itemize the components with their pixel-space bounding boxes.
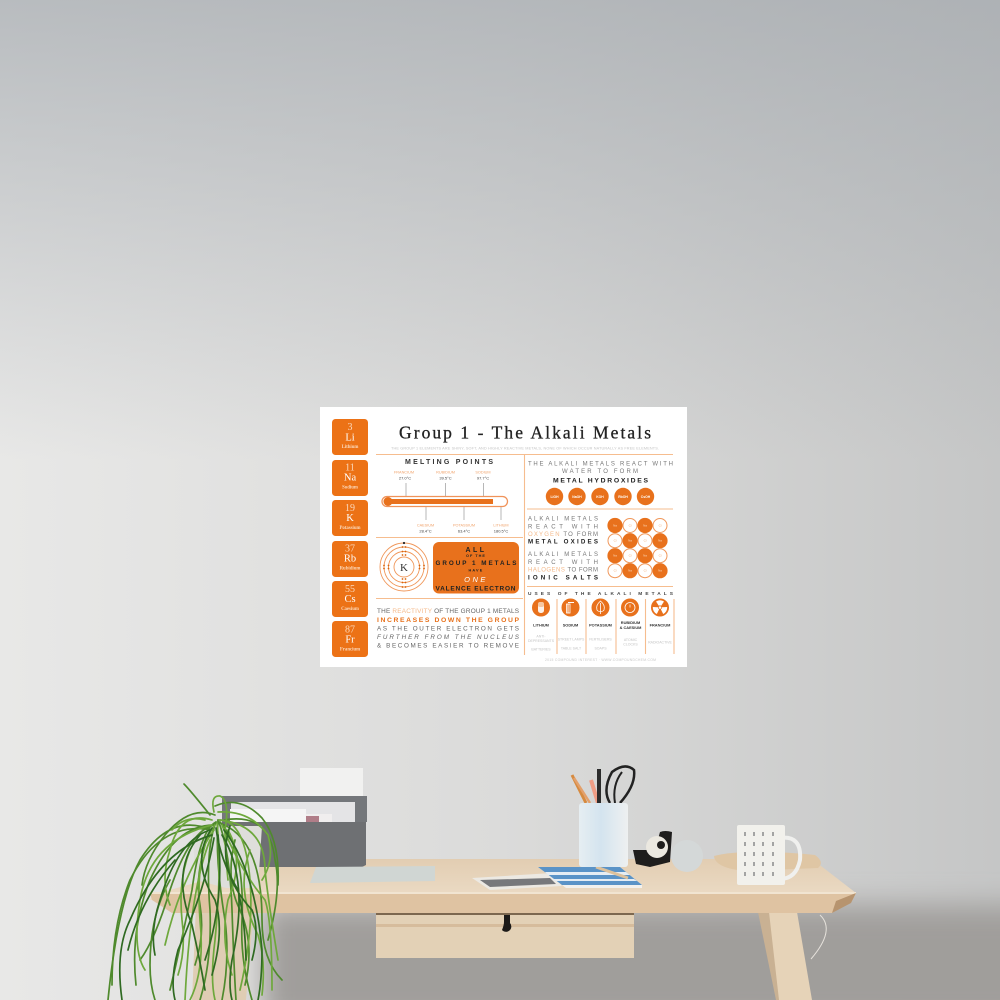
callout: one valence electron: HAVE (468, 568, 484, 572)
panel: ionic salts text: IONIC SALTS (528, 574, 598, 582)
tile: rubidium: Rubidium (340, 566, 360, 572)
callout: one valence electron (433, 542, 519, 594)
ionic lattice diagram: Cl (659, 554, 662, 558)
use details: BATTERIES (531, 648, 551, 652)
tile: sodium: Sodium (342, 486, 358, 490)
desk organiser (222, 768, 367, 867)
temperature labels: CAESIUM (417, 524, 434, 528)
use labels: POTASSIUM (589, 622, 612, 628)
text block: reactivity: INCREASES DOWN THE GROUP (377, 617, 519, 624)
use details: FERTILISERS (589, 638, 612, 642)
panel: metal oxides text: OXYGEN TO FORM (528, 532, 598, 538)
magazine (472, 873, 562, 890)
use details: STREET LAMPS (558, 638, 585, 642)
tile: lithium (332, 419, 368, 455)
icon: sodium street lamp (562, 598, 580, 616)
blue notebook (538, 867, 642, 888)
temperature labels: LITHIUM (493, 524, 509, 528)
tile: potassium: K (346, 513, 354, 524)
panel: ionic salts text: ALKALI METALS (528, 552, 598, 558)
tile: lithium: Li (345, 432, 355, 444)
tile: sodium: Na (344, 472, 356, 484)
tile: francium: 87 (345, 624, 355, 636)
potassium atom diagram: K (400, 562, 408, 574)
ionic lattice diagram: Na (628, 539, 632, 543)
ionic lattice diagram: Cl (644, 539, 647, 543)
tile: francium (332, 621, 368, 657)
panel: metal oxides text: METAL OXIDES (528, 538, 598, 546)
callout: one valence electron: ONE (464, 575, 488, 584)
text block: reactivity (377, 608, 520, 650)
ionic lattice diagram: Na (658, 569, 662, 573)
ionic lattice diagram: Cl (629, 554, 632, 558)
tile: potassium: Potassium (339, 526, 361, 531)
tile: caesium: Cs (344, 594, 356, 605)
potassium atom diagram (380, 542, 428, 591)
ionic lattice diagram: Cl (659, 524, 662, 528)
text block: reactivity: THE REACTIVITY OF THE GROUP 1 METALS (377, 608, 519, 615)
ionic lattice diagram: Cl (614, 569, 617, 573)
panel: ionic salts text (528, 552, 598, 582)
icon: radioactive trefoil (651, 598, 669, 616)
icon: lithium battery (532, 598, 550, 616)
temperature labels: 28.4°C (419, 528, 432, 534)
tile: caesium: 55 (345, 584, 355, 595)
ionic lattice diagram: Na (658, 539, 662, 543)
panel: metal oxides text (528, 516, 598, 546)
ionic lattice diagram: Cl (629, 524, 632, 528)
temperature labels: FRANCIUM (394, 470, 414, 474)
use details: CLOCKS (623, 642, 638, 646)
thermometer (382, 496, 508, 506)
temperature labels: 39.5°C (439, 476, 452, 480)
use labels: RUBIDIUM (621, 620, 640, 625)
tile: lithium: Lithium (342, 445, 358, 450)
tile: potassium (332, 500, 368, 536)
use labels: & CAESIUM (620, 625, 641, 630)
ionic lattice diagram (607, 518, 668, 578)
tile: francium: Francium (340, 648, 360, 652)
ionic lattice diagram: Na (643, 524, 647, 528)
tile: francium: Fr (345, 634, 355, 646)
use details (528, 634, 673, 652)
ionic lattice diagram: Na (628, 569, 632, 573)
footer credit: 2015 COMPOUND INTEREST · WWW.COMPOUNDCHEM.COM (545, 658, 656, 662)
tile: caesium (332, 581, 368, 617)
use labels (533, 620, 670, 630)
temperature labels: POTASSIUM (453, 524, 475, 528)
tape dispenser (633, 831, 672, 867)
plant (108, 784, 282, 1000)
heading: melting points: MELTING POINTS (405, 459, 493, 466)
hydroxide circles: KOH (596, 495, 604, 499)
notepad (310, 866, 435, 883)
text block: reactivity: AS THE OUTER ELECTRON GETS (377, 626, 519, 632)
hydroxide circles (546, 488, 654, 505)
tile: rubidium: 37 (345, 544, 355, 554)
use details: SOAPS (594, 646, 607, 650)
ionic lattice diagram: Na (643, 554, 647, 558)
tile: sodium: 11 (345, 462, 355, 474)
callout: one valence electron: OF THE (466, 554, 486, 558)
icon: atomic clock (621, 598, 639, 616)
tile: lithium: 3 (348, 422, 352, 433)
flower pot (192, 826, 262, 888)
panel: ionic salts text: REACT WITH (528, 560, 598, 566)
use labels: SODIUM (563, 622, 578, 628)
callout: one valence electron: GROUP 1 METALS (436, 560, 516, 567)
subtitle: THE GROUP 1 ELEMENTS ARE SHINY, SOFT, AND HIGHLY REACTIVE METALS, NONE OF WHICH OCCUR NATURALLY AS FREE ELEMENTS. (391, 446, 659, 450)
panel: ionic salts text: HALOGENS TO FORM (528, 568, 598, 574)
use details: ANTI- (536, 634, 546, 638)
hydroxide circles: CsOH (641, 495, 651, 499)
panel: metal hydroxides: METAL HYDROXIDES (553, 478, 648, 484)
use details: ATOMIC (624, 638, 638, 642)
panel: metal oxides text: REACT WITH (528, 524, 598, 530)
icon: potassium leaf (592, 598, 610, 616)
glass sphere (671, 840, 703, 872)
temperature labels (394, 470, 509, 534)
panel: uses of the alkali metals (528, 591, 674, 652)
tile: rubidium: Rb (344, 554, 356, 564)
ionic lattice diagram: Cl (614, 539, 617, 543)
element tile column (332, 419, 368, 657)
mug (737, 825, 800, 885)
text block: reactivity: FURTHER FROM THE NUCLEUS (377, 634, 520, 641)
desk (150, 859, 856, 1000)
use labels: LITHIUM (533, 622, 549, 628)
temperature labels: 180.5°C (494, 528, 508, 534)
ionic lattice diagram: Cl (644, 569, 647, 573)
poster: Group 1 - The Alkali Metals (320, 407, 687, 667)
use labels: FRANCIUM (650, 622, 670, 628)
temperature labels: 27.0°C (399, 476, 411, 480)
hydroxide circles: RbOH (618, 495, 628, 499)
ionic lattice diagram: Na (613, 524, 617, 528)
tile: rubidium (332, 541, 368, 577)
temperature labels: SODIUM (475, 470, 491, 474)
tile: potassium: 19 (345, 503, 355, 514)
temperature labels: 97.7°C (477, 476, 489, 480)
use details: RADIOACTIVE (648, 640, 673, 644)
panel: metal hydroxides (528, 462, 673, 505)
panel: metal hydroxides: WATER TO FORM (562, 469, 638, 475)
use details: DEPRESSANTS (528, 639, 555, 643)
temperature labels: 63.4°C (458, 528, 470, 534)
tile: sodium (332, 460, 368, 496)
heading: uses: USES OF THE ALKALI METALS (528, 591, 674, 597)
title: Group 1 - The Alkali Metals (399, 422, 651, 442)
use details: TABLE SALT (561, 646, 582, 650)
ionic lattice diagram: Na (613, 554, 617, 558)
hydroxide circles: NaOH (572, 495, 582, 499)
hydroxide circles: LiOH (550, 495, 559, 499)
panel: metal oxides text: ALKALI METALS (528, 516, 598, 522)
temperature labels: RUBIDIUM (436, 470, 455, 474)
melting points chart (382, 459, 509, 534)
pencil cup (572, 766, 634, 867)
tile: caesium: Caesium (341, 607, 359, 612)
wooden charger (714, 852, 821, 871)
callout: one valence electron: VALENCE ELECTRON (436, 586, 516, 592)
callout: one valence electron: ALL (465, 547, 487, 554)
panel: metal hydroxides: THE ALKALI METALS REACT WITH (528, 462, 673, 468)
text block: reactivity: & BECOMES EASIER TO REMOVE (377, 642, 519, 650)
